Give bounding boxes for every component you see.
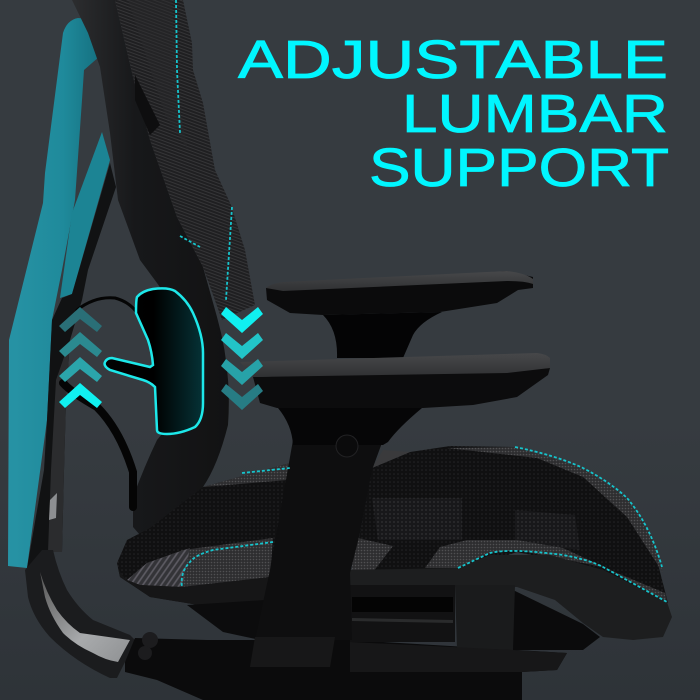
arm post	[255, 440, 383, 640]
title: ADJUSTABLE	[238, 30, 668, 90]
curved metal bracket	[25, 550, 135, 678]
seat mesh front	[352, 446, 668, 603]
seat base and column	[125, 632, 567, 700]
upper armrest	[266, 271, 533, 358]
title	[238, 30, 669, 198]
title: SUPPORT	[369, 138, 669, 198]
icon: down chevrons	[221, 307, 263, 410]
mesh backrest	[115, 0, 255, 320]
back shell	[72, 0, 229, 537]
post base block	[250, 637, 335, 667]
seat front lip	[350, 555, 672, 640]
seat cushion rear	[117, 463, 300, 640]
cable	[63, 298, 138, 507]
lower armrest	[240, 353, 550, 445]
title: LUMBAR	[402, 84, 668, 144]
icon: up chevrons	[59, 307, 102, 408]
arm post knob	[336, 435, 358, 457]
teal dashed stitching	[176, 0, 667, 602]
teal rear frame	[8, 18, 110, 568]
lumbar pad	[105, 288, 203, 434]
seat mechanism	[350, 585, 600, 672]
black frame strut	[27, 163, 116, 568]
